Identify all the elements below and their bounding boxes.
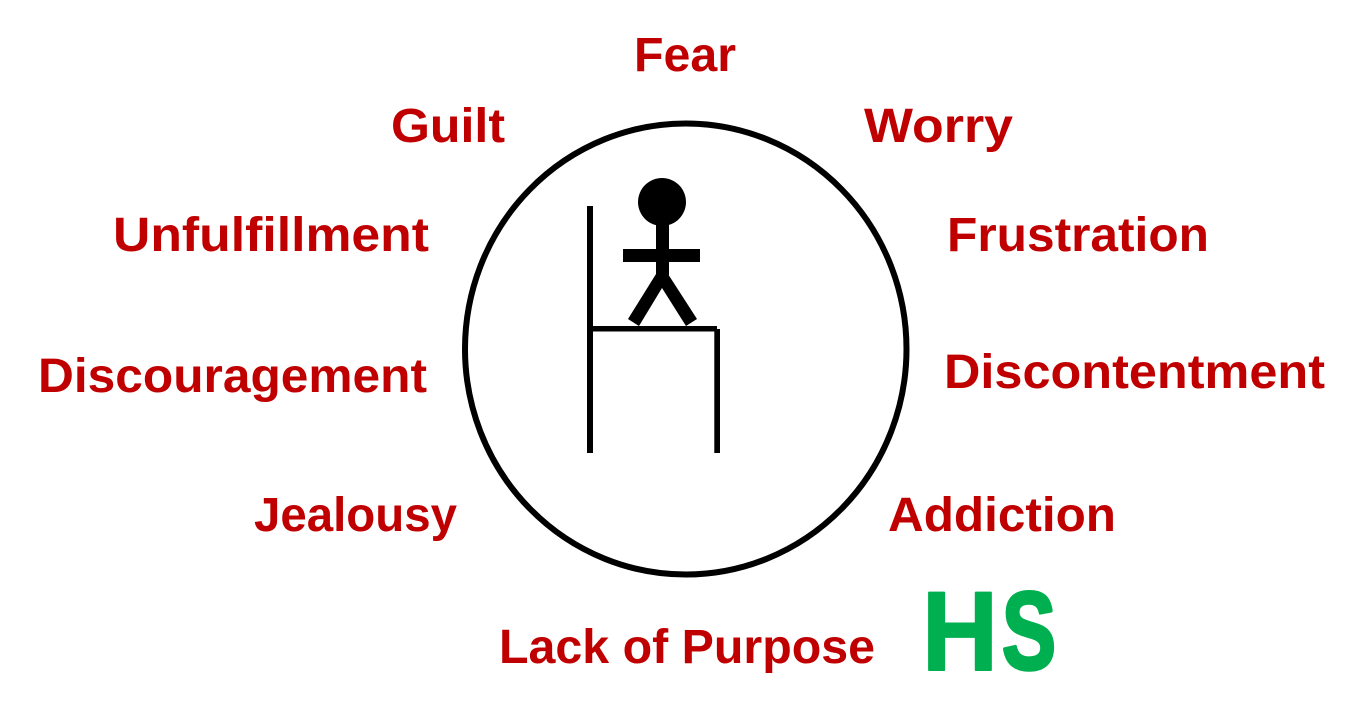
label: Addiction: Addiction	[888, 488, 1116, 542]
label: Fear: Fear	[634, 28, 736, 82]
stick figure	[623, 178, 700, 326]
HS logo: H	[922, 569, 998, 694]
circle	[465, 124, 906, 574]
chair	[587, 206, 720, 453]
label: Guilt: Guilt	[391, 99, 505, 153]
label: Discontentment: Discontentment	[944, 345, 1325, 399]
label: Discouragement: Discouragement	[38, 349, 427, 403]
label: Unfulfillment: Unfulfillment	[113, 208, 429, 262]
label: Jealousy: Jealousy	[254, 488, 457, 542]
HS logo	[922, 569, 1056, 694]
label: Frustration: Frustration	[947, 208, 1209, 262]
label: Lack of Purpose: Lack of Purpose	[499, 620, 875, 674]
icon: stick figure on a chair	[587, 178, 720, 453]
HS logo: S	[1002, 570, 1056, 693]
label: Worry: Worry	[864, 99, 1013, 153]
